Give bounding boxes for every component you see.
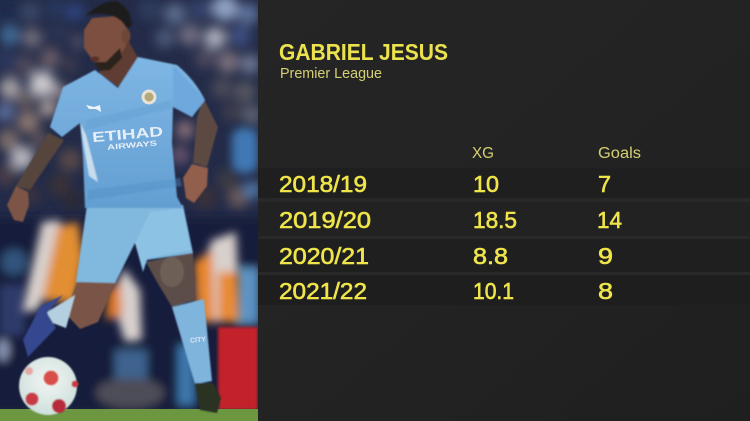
head [84,16,128,70]
right arm [193,97,218,167]
legs [65,282,116,329]
socks [172,299,212,384]
row 2018/19: 10 [473,171,499,197]
ear [122,29,130,43]
ball [19,357,77,415]
grass [0,409,258,421]
puma logo [86,105,101,112]
photo: Gabriel Jesus dribbling: CITY [190,336,207,345]
subtitle: Premier League [280,66,382,82]
row 2021/22: 8 [598,278,613,304]
left arm [16,133,64,190]
row 2020/21: 8.8 [473,243,508,269]
row 2020/21: 2020/21 [279,243,369,269]
column header: XG: XG [472,145,494,162]
advertising board [218,327,258,410]
shirt badge [142,90,156,104]
row 2020/21: 9 [598,243,613,269]
blurred crowd background [0,0,262,210]
photo: Gabriel Jesus dribbling [0,0,268,421]
row 2019/20: 2019/20 [279,207,371,233]
boots [23,295,63,357]
stewards in orange bibs [22,220,240,342]
player [7,1,221,415]
row 2021/22: 10.1 [473,278,514,304]
row 2021/22: 2021/22 [279,278,367,304]
row 2018/19 [279,171,611,197]
title: GABRIEL JESUS [279,39,448,65]
beard [94,48,122,71]
row 2021/22 [279,278,613,304]
row bands [258,168,750,305]
stats panel [258,0,750,421]
row 2018/19: 2018/19 [279,171,367,197]
hair [86,1,132,28]
column header: Goals: Goals [598,145,641,162]
row 2019/20 [279,207,622,233]
neck [100,40,138,88]
photo: Gabriel Jesus dribbling: AIRWAYS [107,138,157,152]
sponsor text: ETIHAD [91,123,164,145]
shirt [50,57,205,208]
row 2019/20: 18.5 [473,207,517,233]
row 2019/20: 14 [597,207,622,233]
row 2020/21 [279,243,613,269]
shorts [76,205,193,283]
row 2018/19: 7 [598,171,611,197]
